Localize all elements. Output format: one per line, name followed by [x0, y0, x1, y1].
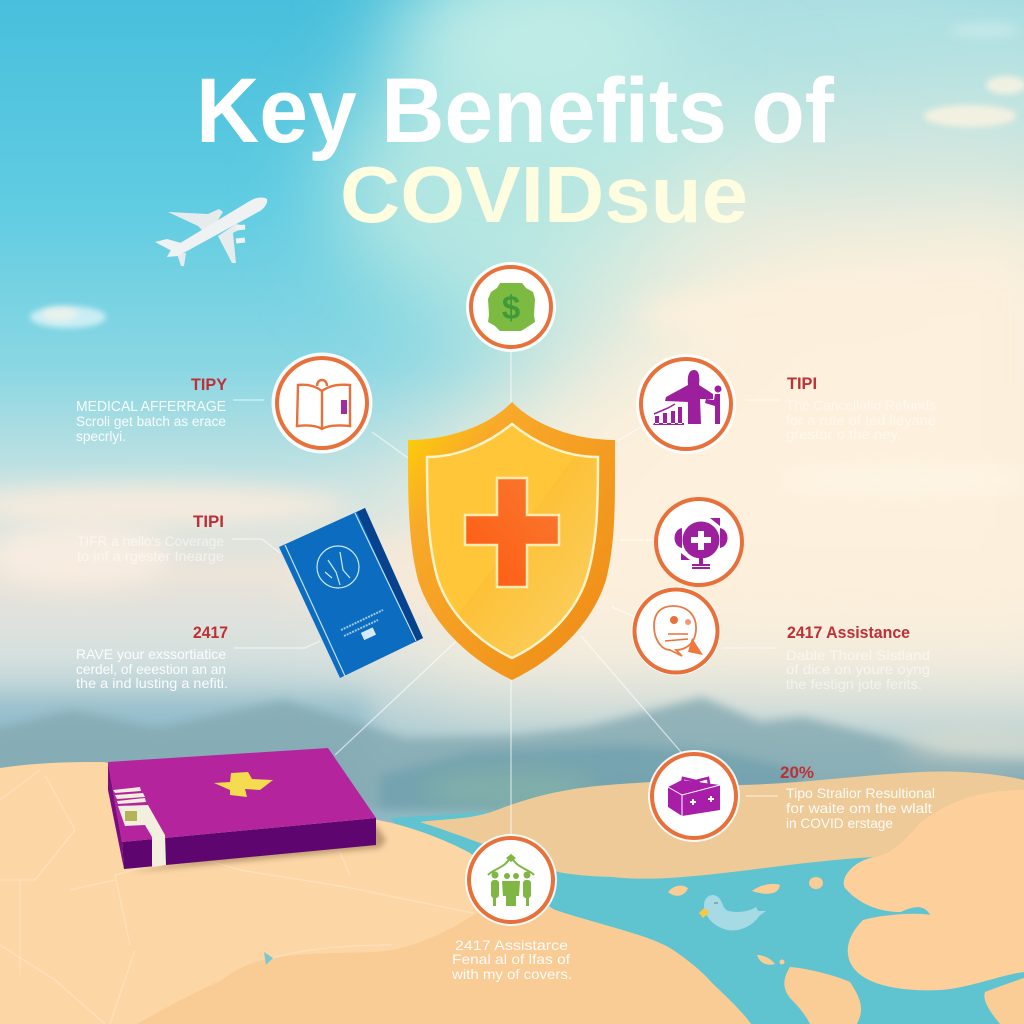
- text block: 20 percent: 20%: [780, 763, 814, 782]
- text block: 20 percent: for waite om the wlalt: [786, 800, 932, 816]
- cross: [465, 478, 559, 587]
- connector lines: [232, 350, 780, 836]
- passport emblem: [317, 546, 359, 588]
- icon node: dollar: [466, 262, 556, 352]
- text block: 20 percent: in COVID erstage: [786, 815, 893, 831]
- text block: cancellation: [786, 374, 936, 442]
- text block: coverage: TIPI: [193, 512, 224, 531]
- text block: 2417 left: RAVE your exssortiatice: [76, 646, 226, 662]
- text block: 2417 left: 2417: [193, 623, 228, 642]
- text block: 2417 left: the a ind lusting a nefiti.: [76, 675, 228, 691]
- left sand with map lines: [0, 762, 751, 1024]
- text block: medical coverage: Scroli get batch as erace: [76, 413, 226, 429]
- kit label: [118, 805, 166, 867]
- icon node: plane person growth: [636, 354, 736, 454]
- text block: 2417 assistance bottom: [451, 937, 572, 982]
- text block: 24/7 assistance right: the festign jote ferits.: [786, 676, 922, 692]
- text block: medical coverage: MEDICAL AFFERRAGE: [76, 398, 226, 415]
- text block: cancellation: TIPI: [787, 374, 817, 393]
- text block: 24/7 assistance right: 2417 Assistance: [787, 623, 910, 642]
- icon node: medical book: [272, 352, 372, 454]
- text block: medical coverage: [76, 375, 228, 444]
- kit plus sign: [214, 772, 273, 797]
- text block: 2417 assistance bottom: with my of covers.: [451, 966, 572, 982]
- bird: [699, 895, 766, 930]
- icon: airplane: [155, 198, 267, 266]
- icon node: gift medical box: [648, 750, 740, 842]
- icon node: group of people: [465, 834, 557, 926]
- title: COVIDsue: [340, 150, 748, 239]
- shield with medical cross: [408, 402, 615, 680]
- icon node: headset: [654, 497, 744, 587]
- text block: 24/7 assistance right: of dice on youre oyng: [786, 661, 930, 677]
- text block: 2417 assistance bottom: 2417 Assistarce: [455, 937, 568, 953]
- text block: 20 percent: [780, 763, 935, 831]
- passport: [279, 508, 423, 678]
- text block: 20 percent: Tipo Stralior Resultional: [786, 785, 935, 801]
- title: [196, 60, 834, 239]
- text block: cancellation: The Cancellatio Refunds: [786, 397, 936, 413]
- icon node: chat: [632, 586, 720, 676]
- bottom islands: [668, 877, 1024, 1024]
- mountains: [0, 695, 1024, 810]
- text block: coverage: TIFR a nello's Coverage: [77, 533, 224, 549]
- text block: 24/7 assistance right: [786, 623, 930, 692]
- text block: coverage: to inf a rgester Inearge: [77, 548, 224, 564]
- medical kit box: [108, 748, 386, 872]
- water: [390, 780, 1024, 1024]
- text block: 2417 left: [76, 623, 228, 691]
- icon node: dollar: $: [502, 289, 520, 326]
- right sand: [844, 790, 1024, 990]
- text block: cancellation: for a rute of ted lleyane: [786, 412, 936, 428]
- text block: coverage: [77, 512, 224, 564]
- far sand bank: [420, 771, 1024, 879]
- text block: 2417 assistance bottom: Fenal al of lfas of: [452, 951, 570, 967]
- text block: 24/7 assistance right: Dable Thorel Slstland: [786, 647, 930, 663]
- title: Key Benefits of: [196, 60, 834, 162]
- text block: cancellation: grestor o the ney.: [786, 426, 901, 442]
- clouds: [0, 23, 1024, 609]
- text block: 2417 left: cerdel, of eeestion an an: [76, 661, 226, 677]
- text block: medical coverage: specrlyi.: [76, 428, 126, 444]
- text block: medical coverage: TIPY: [191, 375, 228, 394]
